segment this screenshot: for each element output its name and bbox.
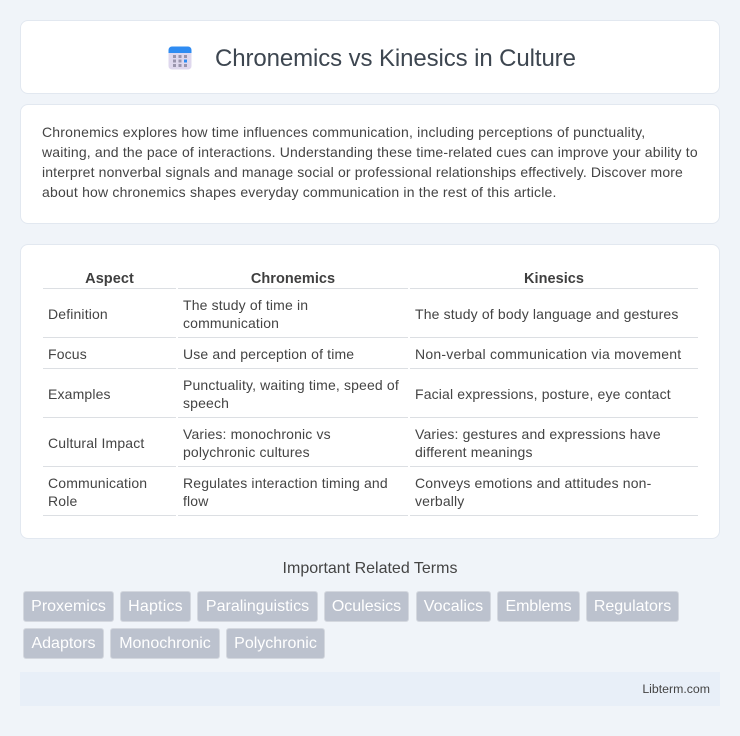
- row: cultural impact: Varies: monochronic vs: [183, 426, 331, 442]
- tag: Adaptors: [31, 635, 96, 652]
- intro text: interpret nonverbal signals and manage social or professional relationships effectively. Discover more: [42, 164, 683, 180]
- row: cultural impact: Varies: gestures and expressions have: [415, 426, 661, 442]
- panel: introduction: [20, 104, 720, 224]
- tag: [110, 628, 220, 659]
- row: definition: [48, 297, 678, 331]
- heading: related terms: Important Related Terms: [283, 560, 457, 577]
- row: focus: [48, 346, 682, 362]
- tag: Polychronic: [234, 635, 317, 652]
- footer: [20, 672, 720, 706]
- table header: Chronemics: [251, 271, 335, 287]
- row: examples: Punctuality, waiting time, speed of: [183, 377, 399, 393]
- tag: Haptics: [128, 598, 183, 615]
- row: examples: [48, 377, 671, 411]
- row: cultural impact: different meanings: [415, 444, 533, 460]
- tag: [23, 628, 104, 659]
- tag: Paralinguistics: [206, 598, 309, 615]
- tag: [324, 591, 409, 622]
- tag: [23, 591, 114, 622]
- row: focus: Use and perception of time: [183, 346, 354, 362]
- row: cultural impact: [48, 426, 661, 460]
- row: focus: Non-verbal communication via movement: [415, 346, 681, 362]
- table header: Aspect: [85, 271, 134, 287]
- row: examples: Examples: [48, 386, 111, 402]
- row: cultural impact: polychronic cultures: [183, 444, 310, 460]
- row: communication role: Regulates interaction timing and: [183, 475, 388, 491]
- tag: Regulators: [594, 598, 671, 615]
- row: focus: Focus: [48, 346, 87, 362]
- tag: Vocalics: [424, 598, 483, 615]
- tag: [497, 591, 580, 622]
- row: definition: The study of time in: [183, 297, 308, 313]
- intro text: Chronemics explores how time influences communication, including perceptions of punctuality,: [42, 124, 645, 140]
- row: communication role: [48, 475, 651, 509]
- row: cultural impact: Cultural Impact: [48, 435, 144, 451]
- tag: [197, 591, 318, 622]
- table header: [85, 271, 584, 287]
- row: examples: speech: [183, 395, 229, 411]
- tag: [586, 591, 679, 622]
- tag: Oculesics: [332, 598, 401, 615]
- title: Chronemics vs Kinesics in Culture: [215, 45, 576, 72]
- tag: Proxemics: [31, 598, 106, 615]
- tag: [120, 591, 191, 622]
- intro text: [42, 124, 698, 200]
- row: communication role: Communication: [48, 475, 147, 491]
- row: definition: communication: [183, 315, 279, 331]
- tag list: related terms: [23, 591, 679, 659]
- tag: [416, 591, 491, 622]
- row: definition: The study of body language and gestures: [415, 306, 678, 322]
- table header: Kinesics: [524, 271, 584, 287]
- tag: Monochronic: [119, 635, 211, 652]
- row: communication role: flow: [183, 493, 208, 509]
- row: examples: Facial expressions, posture, eye contact: [415, 386, 671, 402]
- panel: title header: [20, 20, 720, 94]
- intro text: waiting, and the pace of interactions. Understanding these time-related cues can improve your ability to: [42, 144, 698, 160]
- tag: Emblems: [506, 598, 571, 615]
- intro text: about how chronemics shapes everyday communication in the rest of this article.: [42, 184, 557, 200]
- icon: calendar: [168, 46, 192, 70]
- row: communication role: Conveys emotions and attitudes non-: [415, 475, 651, 491]
- row: communication role: Role: [48, 493, 77, 509]
- tag: [226, 628, 325, 659]
- row: communication role: verbally: [415, 493, 464, 509]
- footer credit: Libterm.com: [642, 682, 710, 696]
- row: definition: Definition: [48, 306, 108, 322]
- panel: comparison table: [20, 244, 720, 539]
